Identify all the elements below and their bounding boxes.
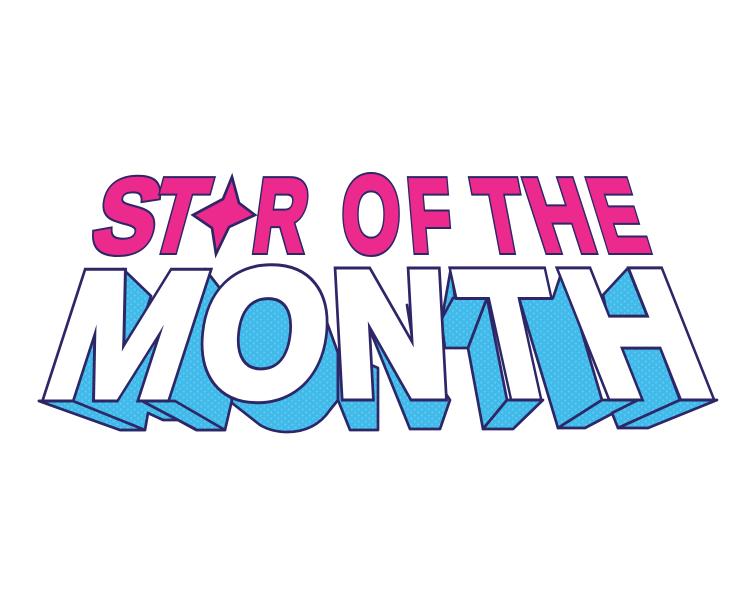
letter O: O	[193, 236, 337, 431]
letter R: R	[247, 158, 315, 273]
letter E: E	[577, 159, 659, 274]
letter S: S	[83, 157, 172, 275]
blue 3d extrusion	[39, 268, 717, 432]
letter H: H	[512, 159, 607, 274]
letter O: O	[193, 236, 337, 431]
letter N: N	[328, 237, 453, 432]
letter H: H	[512, 159, 607, 274]
letter M: M	[25, 237, 228, 434]
letter S: S	[83, 157, 172, 275]
icon: four-point star	[193, 177, 255, 254]
letter T: T	[466, 159, 534, 274]
letter H: H	[539, 236, 733, 433]
letter R: R	[247, 158, 315, 273]
letter O: O	[342, 154, 400, 275]
letter M: M	[25, 237, 228, 434]
letter T: T	[466, 159, 534, 274]
letter T: T	[445, 236, 578, 432]
letter F: F	[403, 157, 456, 273]
letter T: T	[139, 158, 219, 273]
letter E: E	[577, 159, 659, 274]
letter H: H	[539, 236, 733, 433]
letter T: T	[139, 158, 219, 273]
letter F: F	[403, 157, 456, 273]
letter N: N	[328, 237, 453, 432]
heading line: star of the	[83, 154, 659, 275]
heading line: month	[25, 236, 733, 434]
letter O: O	[342, 154, 400, 275]
letter T: T	[445, 236, 578, 432]
